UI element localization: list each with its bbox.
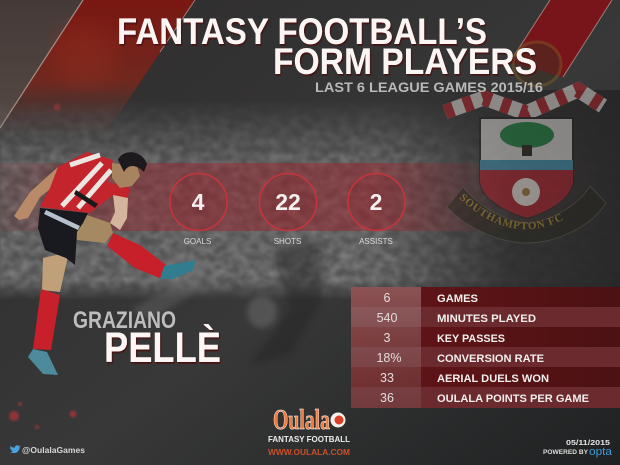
- panel: stats table: [351, 287, 620, 408]
- shorts: [38, 208, 88, 265]
- player first name: GRAZIANO: [73, 307, 176, 334]
- powered by opta: POWERED BY: [543, 450, 588, 456]
- table labels: GAMES: [437, 293, 478, 305]
- standing leg: [42, 252, 69, 292]
- title: FANTASY FOOTBALL’S: [117, 11, 487, 52]
- right arm: [110, 195, 128, 230]
- sponsor logo: [74, 190, 98, 208]
- right diagonal red band: [510, 0, 612, 77]
- twitter handle: @OulalaGames: [22, 445, 85, 455]
- red tinted stats band: [0, 163, 620, 231]
- table labels: [437, 293, 589, 405]
- table labels: MINUTES PLAYED: [437, 313, 536, 325]
- stat: shots: [260, 174, 316, 246]
- icon: Southampton crest: SOUTHAMPTON FC: [460, 194, 563, 230]
- hair: [118, 152, 147, 172]
- date: 05/11/2015: [566, 438, 610, 447]
- kicking thigh: [75, 215, 113, 243]
- table labels: OULALA POINTS PER GAME: [437, 393, 589, 405]
- stat: assists: 2: [370, 189, 382, 215]
- standing sock: [33, 289, 60, 350]
- powered by opta: opta: [589, 446, 613, 458]
- neck and face: [112, 163, 140, 188]
- stat: goals: GOALS: [184, 237, 211, 246]
- crowd photo strip: [0, 108, 548, 297]
- crest tree: [500, 122, 554, 148]
- table values: 36: [380, 391, 394, 405]
- kicking boot: [160, 260, 196, 279]
- title: FORM PLAYERS: [273, 41, 537, 82]
- crest shield: [480, 118, 573, 218]
- subtitle: LAST 6 LEAGUE GAMES 2015/16: [315, 79, 543, 95]
- stat: assists: ASSISTS: [359, 237, 393, 246]
- powered by opta: [543, 446, 613, 458]
- player surname: PELLÈ: [104, 324, 221, 372]
- stat: shots: SHOTS: [274, 237, 301, 246]
- player figure: [14, 152, 196, 375]
- table labels: CONVERSION RATE: [437, 353, 544, 365]
- decorative sparks: [9, 402, 76, 429]
- standing boot: [28, 349, 58, 375]
- icon: Southampton crest: [442, 40, 607, 244]
- table values: 3: [384, 331, 391, 345]
- crest scarf: [445, 90, 603, 113]
- crest halo ball: [513, 42, 561, 86]
- logo football: [330, 412, 346, 428]
- stat: goals: [170, 174, 227, 246]
- jersey: [40, 152, 130, 213]
- table labels: AERIAL DUELS WON: [437, 373, 549, 385]
- crest rose: [512, 178, 540, 206]
- stat: goals: 4: [192, 189, 205, 215]
- table values: 6: [384, 291, 391, 305]
- background blurred players: [130, 240, 322, 365]
- oulala logo: Oulala: [273, 405, 330, 436]
- table values: 18%: [376, 351, 402, 365]
- left diagonal red band: [0, 0, 195, 135]
- table values: 33: [380, 371, 394, 385]
- title: [117, 11, 537, 82]
- icon: twitter bird: [10, 445, 20, 453]
- table values: [376, 291, 402, 405]
- kicking sock: [107, 233, 166, 279]
- table values: 540: [377, 311, 397, 325]
- crest ribbon: [447, 186, 606, 243]
- footer: fantasy football: FANTASY FOOTBALL: [268, 434, 350, 444]
- footer: website: WWW.OULALA.COM: [268, 447, 350, 457]
- stat: assists: [348, 174, 405, 246]
- stat: shots: 22: [275, 189, 301, 215]
- table labels: KEY PASSES: [437, 333, 505, 345]
- left arm: [14, 167, 62, 220]
